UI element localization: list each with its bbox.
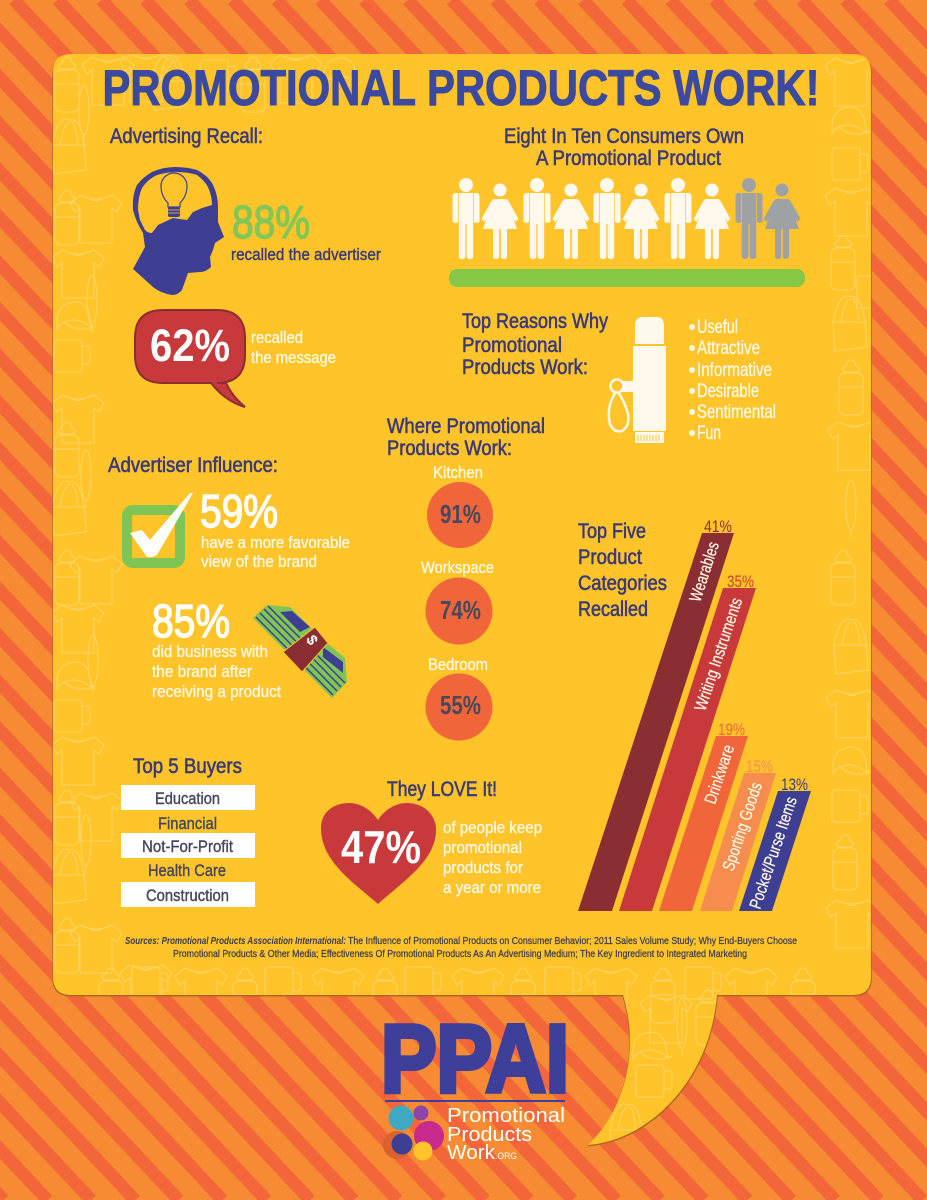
list: reasons: Sentimental (697, 402, 776, 423)
buyer: education: Education (155, 789, 220, 808)
stat: workspace 74 percent: 74% (440, 595, 481, 625)
logo wordmark: PPAI (381, 1006, 569, 1112)
heading: top reasons: Promotional (462, 334, 562, 357)
icon: money with band (253, 605, 347, 698)
sources (125, 935, 797, 960)
stat: workspace 74 percent (421, 558, 494, 644)
green bar (449, 269, 805, 287)
buyer: health care: Health Care (148, 861, 226, 880)
stat: bedroom 55 percent: Bedroom (428, 655, 488, 674)
logo text (447, 1105, 565, 1164)
label: did business: the brand after (152, 663, 252, 681)
stat: 88 percent: 88% (232, 196, 310, 248)
section: advertising recall (110, 125, 381, 407)
section: where promotional products work (387, 415, 545, 740)
label: did business: did business with (152, 643, 268, 661)
stat: workspace 74 percent: Workspace (421, 558, 494, 577)
section: top 5 buyers (121, 755, 255, 907)
section: advertiser influence (108, 454, 350, 701)
stat: 85 percent: 85% (152, 595, 230, 647)
bar: sporting goods 15 percent (700, 757, 776, 911)
label: favorable view: view of the brand (201, 553, 317, 571)
heading: where: Where Promotional (387, 415, 545, 438)
stat: 59 percent: 59% (200, 485, 278, 537)
stat: kitchen 91 percent (427, 463, 493, 548)
buyer: education (121, 785, 255, 810)
buyer: not-for-profit (121, 833, 255, 858)
buyer: construction: Construction (146, 886, 229, 905)
bar: writing instruments 35 percent (619, 572, 756, 911)
list: reasons: Attractive (697, 338, 760, 359)
heading: top five (578, 520, 667, 621)
logo: PPAI Promotional Products Work (381, 1006, 569, 1164)
bar: writing instruments 35 percent: Writing Instruments (691, 595, 746, 713)
bar: drinkware 19 percent: Drinkware (701, 742, 738, 806)
stat: bedroom 55 percent (426, 655, 492, 740)
heading: top reasons: Top Reasons Why (462, 310, 608, 333)
bar: pocket purse items 13 percent: 13% (781, 775, 808, 794)
bar: drinkware 19 percent: 19% (718, 720, 745, 739)
sources: Promotional Products & Other Media; Effectiveness Of Promotional Products As An Advertising Medium; The Key Ingredient to Integrated Marketing (173, 948, 747, 960)
list: reasons: Desirable (697, 381, 759, 402)
list: reasons: Informative (697, 360, 772, 381)
heading: top five: Product (578, 546, 642, 569)
label: keep for a year (443, 819, 542, 897)
bar: writing instruments 35 percent: 35% (727, 572, 754, 591)
sources: Sources: Promotional Products Association International: (125, 935, 346, 947)
heading: eight in ten: A Promotional Product (536, 147, 721, 170)
bar: pocket purse items 13 percent: Pocket/Purse Items (746, 794, 801, 911)
section: top reasons why (462, 310, 776, 444)
icon row: ten people (452, 178, 800, 259)
logo text: .ORG (495, 1151, 517, 1161)
logo text: Promotional (447, 1105, 565, 1127)
list: reasons: Useful (697, 317, 738, 338)
bar: sporting goods 15 percent: 15% (746, 757, 773, 776)
label: keep for a year: of people keep (443, 819, 542, 837)
icon: speech bubble with 62 percent: 62% (150, 320, 230, 371)
stat: bedroom 55 percent: 55% (440, 690, 481, 720)
icon: head with light bulb (133, 167, 224, 295)
icon: money with band: $ (302, 632, 321, 649)
logo text: Work (447, 1142, 496, 1164)
heading: advertiser influence: Advertiser Influence: (108, 454, 278, 477)
heading: top 5 buyers: Top 5 Buyers (133, 755, 242, 778)
heading: top five: Top Five (578, 520, 646, 543)
heading: eight in ten: Eight In Ten Consumers Own (504, 125, 744, 148)
sources: The Influence of Promotional Products on Consumer Behavior; 2011 Sales Volume Study; Why End-Buyers Choose (348, 935, 797, 947)
icon: heart with 47 percent (321, 803, 436, 904)
section: eight in ten consumers (449, 125, 805, 287)
bar: wearables 41 percent (578, 517, 734, 911)
heading: where (387, 415, 545, 460)
heading: top reasons: Products Work: (462, 356, 588, 379)
icon: heart with 47 percent: 47% (341, 821, 421, 873)
heading: eight in ten (504, 125, 744, 170)
stat: kitchen 91 percent: Kitchen (433, 463, 483, 482)
heading: top reasons (462, 310, 608, 379)
list: reasons (689, 317, 776, 444)
label: keep for a year: products for (443, 859, 523, 877)
heading: they love it: They LOVE It! (387, 778, 497, 801)
label: did business: receiving a product (152, 683, 281, 701)
icon: thermos (609, 317, 666, 443)
buyer: not-for-profit: Not-For-Profit (142, 837, 233, 856)
label: recalled the advertiser: recalled the advertiser (231, 246, 381, 264)
label: recalled the message (251, 329, 336, 367)
icon: green check box (127, 493, 193, 563)
bar: sporting goods 15 percent: Sporting Goods (719, 780, 766, 873)
label: keep for a year: a year or more (443, 879, 541, 897)
bar: wearables 41 percent: 41% (704, 517, 732, 536)
stat: kitchen 91 percent: 91% (440, 499, 481, 529)
label: favorable view (201, 534, 350, 571)
buyer: construction (121, 882, 255, 907)
label: recalled the message: the message (251, 349, 336, 367)
bar: drinkware 19 percent (659, 720, 748, 911)
buyer: financial: Financial (158, 814, 217, 833)
heading: top five: Recalled (578, 598, 648, 621)
list: reasons: Fun (697, 423, 721, 444)
label: recalled the message: recalled (251, 329, 303, 347)
bar: wearables 41 percent: Wearables (686, 539, 723, 604)
heading: where: Products Work: (387, 437, 512, 460)
section: they love it (321, 778, 542, 904)
label: did business (152, 643, 281, 701)
label: keep for a year: promotional (443, 839, 522, 857)
icon: speech bubble with 62 percent (135, 310, 245, 407)
label: favorable view: have a more favorable (201, 534, 350, 552)
heading: top five: Categories (578, 572, 667, 595)
logo bubbles (383, 1106, 444, 1160)
logo text: Products (447, 1124, 532, 1146)
section: top five product categories (578, 517, 811, 911)
heading: advertising recall: Advertising Recall: (110, 125, 263, 148)
